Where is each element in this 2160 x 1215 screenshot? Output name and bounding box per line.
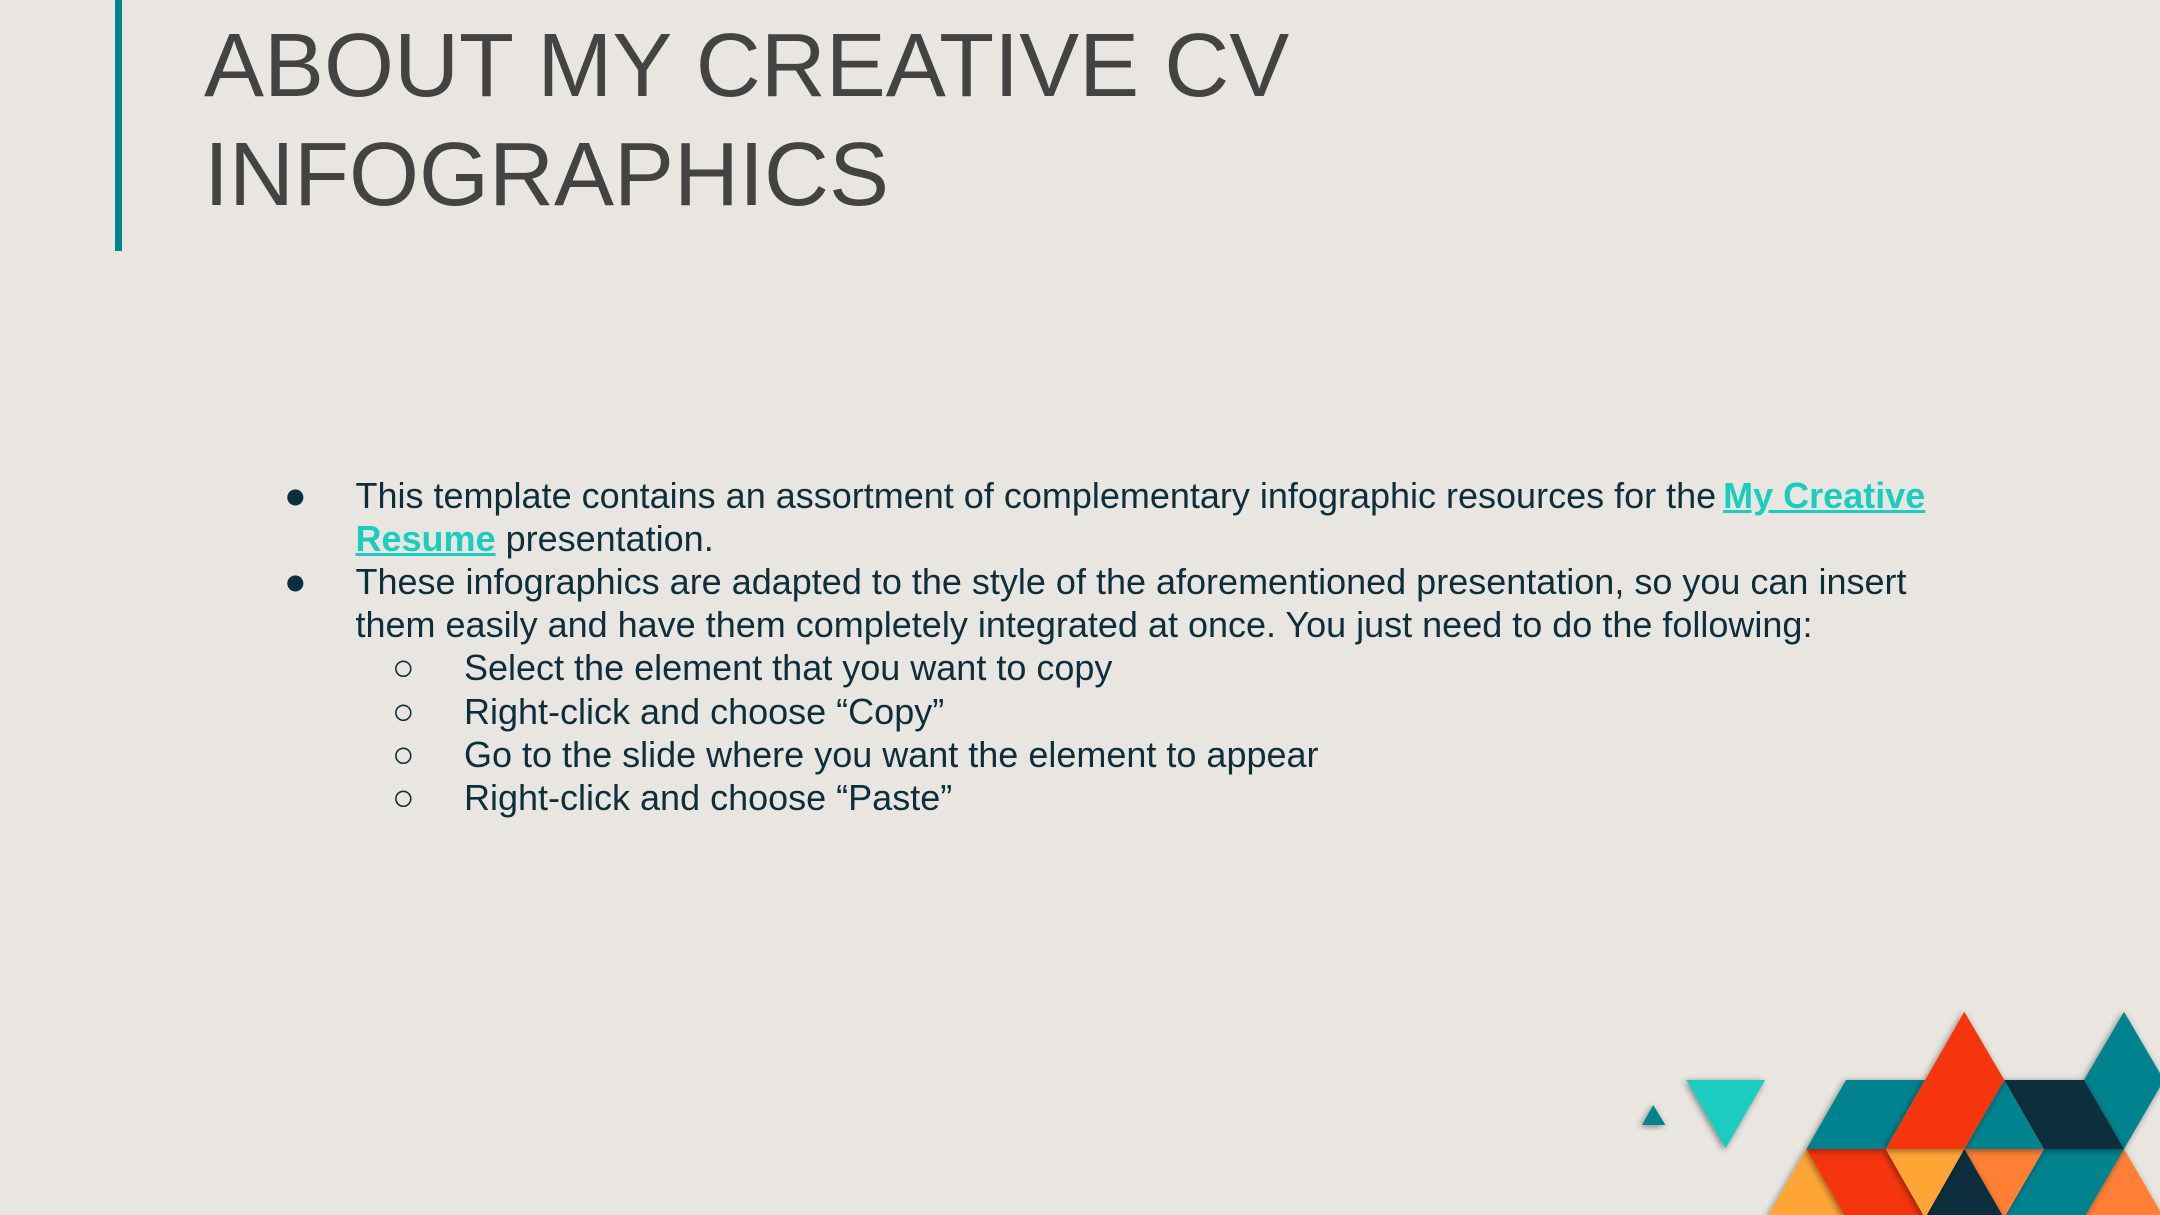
decorative triangle mosaic bbox=[1767, 1012, 2160, 1215]
bullet 2 text: These infographics are adapted to the style of the aforementioned presentation, so you can insert bbox=[356, 561, 1906, 602]
icon: cyan inverted triangle bbox=[1686, 1080, 1765, 1148]
bullet 1 text continued: Resume presentation. bbox=[356, 518, 714, 559]
sub-bullet 4 marker: ○ bbox=[392, 776, 415, 818]
bullet 2 marker: ● bbox=[284, 560, 307, 602]
body text list bbox=[284, 474, 1926, 818]
title: INFOGRAPHICS bbox=[204, 125, 889, 225]
icon: small teal triangle bbox=[1642, 1105, 1665, 1125]
bullet 1 marker: ● bbox=[284, 474, 307, 516]
bullet 1 text: This template contains an assortment of complementary infographic resources for the My Creative bbox=[356, 474, 1925, 516]
accent bar bbox=[115, 0, 122, 251]
sub-bullet 2 marker: ○ bbox=[392, 690, 415, 732]
bullet 2 text continued: them easily and have them completely integrated at once. You just need to do the following: bbox=[356, 604, 1812, 645]
sub-bullet 1 marker: ○ bbox=[392, 646, 415, 688]
sub-bullet 3 text: Go to the slide where you want the element to appear bbox=[464, 734, 1319, 775]
sub-bullet 1 text: Select the element that you want to copy bbox=[464, 647, 1112, 688]
title: ABOUT MY CREATIVE CV bbox=[204, 16, 1289, 116]
sub-bullet 2 text: Right-click and choose “Copy” bbox=[464, 690, 944, 732]
title bbox=[204, 16, 1289, 225]
sub-bullet 4 text: Right-click and choose “Paste” bbox=[464, 777, 952, 818]
sub-bullet 3 marker: ○ bbox=[392, 733, 415, 775]
